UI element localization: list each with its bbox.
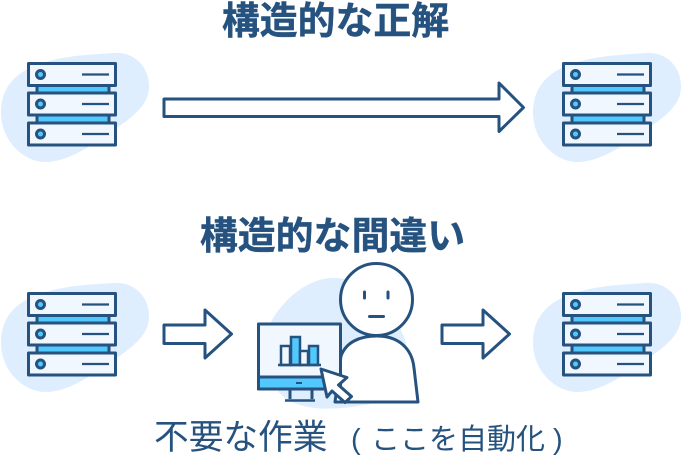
illustration: person at monitor xyxy=(258,264,418,409)
caption: unnecessary work: ) xyxy=(553,424,563,456)
arrow: short arrow right xyxy=(442,310,510,358)
person body xyxy=(335,336,418,402)
icon: server stack bottom left xyxy=(1,283,149,392)
background blob xyxy=(265,278,409,409)
monitor xyxy=(258,324,340,400)
person head xyxy=(340,264,412,336)
arrow: short arrow left xyxy=(164,310,232,358)
title: structural mistake: 構造的な間違い xyxy=(200,216,465,258)
icon: server stack bottom right xyxy=(533,283,681,392)
title: structural correct answer: 構造的な正解 xyxy=(222,1,449,43)
caption: unnecessary work: ( xyxy=(351,424,361,456)
icon: server stack top left xyxy=(1,53,149,162)
cursor arrow xyxy=(321,369,352,402)
caption: unnecessary work: ここを自動化 xyxy=(371,423,545,456)
bar chart on monitor xyxy=(278,337,321,365)
icon: server stack top right xyxy=(533,53,681,162)
arrow: long arrow xyxy=(164,83,524,132)
caption: unnecessary work: 不要な作業 xyxy=(154,418,327,457)
